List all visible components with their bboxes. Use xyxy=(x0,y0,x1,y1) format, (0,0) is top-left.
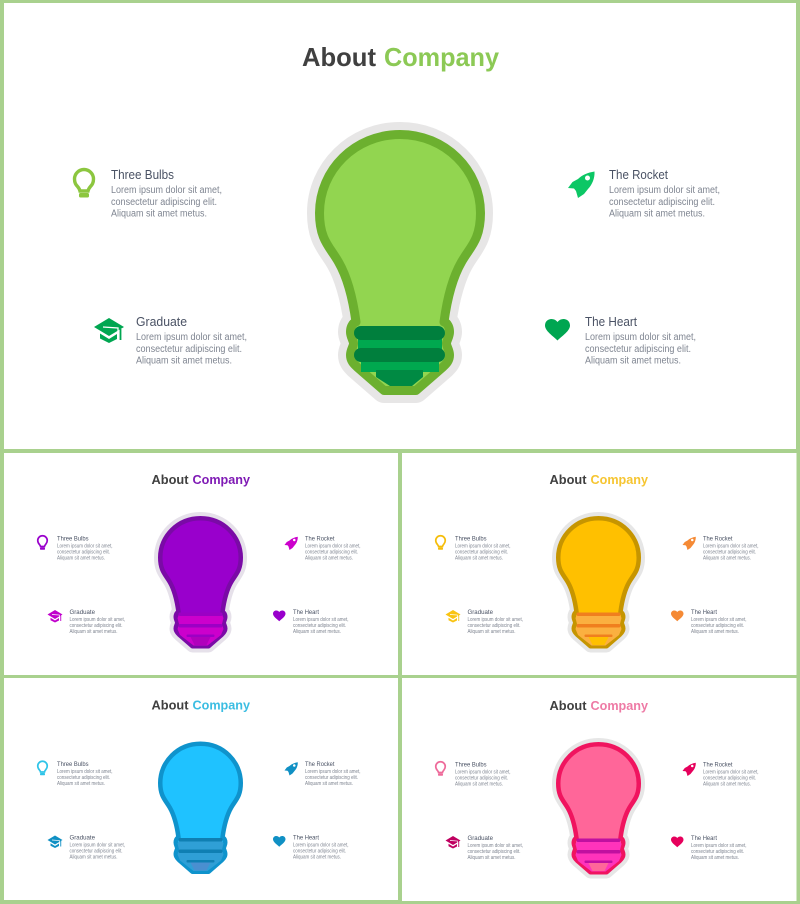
item: Three Bulbs: Aliquam sit amet metus. xyxy=(57,555,105,561)
item: Graduate: Lorem ipsum dolor sit amet, xyxy=(468,843,523,849)
item: Graduate: Lorem ipsum dolor sit amet, xyxy=(70,617,125,623)
title: About xyxy=(550,472,587,487)
item: The Heart: Aliquam sit amet metus. xyxy=(293,629,341,635)
title: About xyxy=(152,698,189,712)
item: The Rocket: Aliquam sit amet metus. xyxy=(305,555,353,561)
item: Graduate: consectetur adipiscing elit. xyxy=(136,344,242,355)
title accent: Company xyxy=(192,698,251,712)
light bulb xyxy=(320,134,480,390)
item: Graduate xyxy=(94,314,247,366)
item: Graduate: consectetur adipiscing elit. xyxy=(70,623,122,629)
item: Graduate: Graduate xyxy=(70,609,95,616)
item: The Heart xyxy=(273,834,348,860)
item: Three Bulbs: Three Bulbs xyxy=(57,761,89,768)
item: The Heart xyxy=(671,835,746,861)
item: Three Bulbs: Lorem ipsum dolor sit amet, xyxy=(111,185,222,196)
title accent: Company xyxy=(590,472,649,487)
item: Three Bulbs: Three Bulbs xyxy=(111,167,174,182)
item: Graduate: consectetur adipiscing elit. xyxy=(468,849,520,855)
item: The Heart: Lorem ipsum dolor sit amet, xyxy=(293,842,348,848)
item: Three Bulbs: Aliquam sit amet metus. xyxy=(455,555,503,561)
item: The Heart: The Heart xyxy=(585,314,637,329)
item: The Heart: Aliquam sit amet metus. xyxy=(691,855,739,861)
item: Graduate: Graduate xyxy=(70,834,95,842)
item: Graduate xyxy=(446,835,523,861)
item: Graduate: Lorem ipsum dolor sit amet, xyxy=(136,332,247,343)
item: Graduate: Graduate xyxy=(468,835,493,842)
item: The Heart xyxy=(671,609,746,635)
item: Three Bulbs xyxy=(436,762,510,787)
panel: blue slide xyxy=(4,678,398,900)
item: Three Bulbs: Lorem ipsum dolor sit amet, xyxy=(455,770,510,776)
item: The Heart: Lorem ipsum dolor sit amet, xyxy=(691,617,746,623)
item: The Rocket: The Rocket xyxy=(305,761,335,768)
item: The Heart: The Heart xyxy=(293,609,319,616)
item: Three Bulbs: consectetur adipiscing elit. xyxy=(57,550,110,556)
light bulb xyxy=(160,744,241,872)
item: The Rocket: consectetur adipiscing elit. xyxy=(703,550,756,556)
item: The Rocket: Lorem ipsum dolor sit amet, xyxy=(305,769,360,775)
item: Three Bulbs: consectetur adipiscing elit. xyxy=(455,550,508,556)
item: Three Bulbs: consectetur adipiscing elit. xyxy=(455,776,508,782)
item: The Heart: Lorem ipsum dolor sit amet, xyxy=(293,617,348,623)
item: The Heart: Aliquam sit amet metus. xyxy=(293,854,341,860)
item: Graduate: Aliquam sit amet metus. xyxy=(70,629,118,635)
title: About xyxy=(152,472,189,487)
item: The Rocket xyxy=(568,167,720,220)
item: Three Bulbs: Lorem ipsum dolor sit amet, xyxy=(57,769,112,775)
item: Graduate: Graduate xyxy=(468,609,493,616)
item: The Rocket: Lorem ipsum dolor sit amet, xyxy=(305,544,360,550)
panel: green main slide xyxy=(4,3,796,449)
light bulb xyxy=(558,744,639,872)
panel: orange slide xyxy=(402,453,796,675)
item: The Heart: The Heart xyxy=(691,835,717,842)
item: Three Bulbs xyxy=(74,167,222,220)
item: The Heart: Lorem ipsum dolor sit amet, xyxy=(585,332,696,343)
item: The Rocket: Lorem ipsum dolor sit amet, xyxy=(703,544,758,550)
item: The Rocket xyxy=(682,762,758,787)
item: The Rocket xyxy=(284,536,360,561)
item: Three Bulbs: Aliquam sit amet metus. xyxy=(57,781,105,787)
item: Three Bulbs: consectetur adipiscing elit. xyxy=(111,197,217,208)
item: The Rocket: consectetur adipiscing elit. xyxy=(305,775,358,781)
item: The Rocket xyxy=(682,536,758,561)
item: The Rocket: consectetur adipiscing elit. xyxy=(609,197,715,208)
panel: purple slide xyxy=(4,453,398,675)
light bulb xyxy=(160,518,241,646)
item: Three Bulbs: Lorem ipsum dolor sit amet, xyxy=(455,544,510,550)
item: The Rocket xyxy=(284,761,360,787)
item: The Rocket: Aliquam sit amet metus. xyxy=(703,781,751,787)
item: The Heart: The Heart xyxy=(691,609,717,616)
item: Three Bulbs: Aliquam sit amet metus. xyxy=(455,781,503,787)
item: Graduate xyxy=(446,609,523,635)
item: Graduate: Aliquam sit amet metus. xyxy=(70,854,118,860)
item: Graduate: Aliquam sit amet metus. xyxy=(468,855,516,861)
item: The Heart: The Heart xyxy=(293,834,319,842)
panel: pink slide xyxy=(402,678,796,901)
item: The Rocket: Aliquam sit amet metus. xyxy=(703,555,751,561)
light bulb xyxy=(558,518,639,646)
item: The Heart: Aliquam sit amet metus. xyxy=(691,629,739,635)
item: Graduate: Aliquam sit amet metus. xyxy=(136,356,232,366)
item: Three Bulbs: Three Bulbs xyxy=(455,762,487,768)
item: Three Bulbs: Lorem ipsum dolor sit amet, xyxy=(57,544,112,550)
item: The Rocket: Aliquam sit amet metus. xyxy=(609,208,705,220)
item: The Heart: Lorem ipsum dolor sit amet, xyxy=(691,843,746,849)
title: About xyxy=(302,42,376,72)
item: Three Bulbs xyxy=(38,761,112,787)
item: Three Bulbs: Three Bulbs xyxy=(455,536,487,542)
item: Three Bulbs: Three Bulbs xyxy=(57,536,89,542)
item: The Heart: consectetur adipiscing elit. xyxy=(293,848,346,854)
item: Graduate: Lorem ipsum dolor sit amet, xyxy=(70,842,125,848)
item: Graduate: consectetur adipiscing elit. xyxy=(468,623,520,629)
item: The Heart xyxy=(545,314,696,366)
item: The Rocket: The Rocket xyxy=(609,167,668,182)
item: The Rocket: Aliquam sit amet metus. xyxy=(305,781,353,787)
title accent: Company xyxy=(590,698,649,713)
item: The Heart: Aliquam sit amet metus. xyxy=(585,356,681,366)
title accent: Company xyxy=(384,42,500,72)
item: Graduate: Aliquam sit amet metus. xyxy=(468,629,516,635)
item: The Heart: consectetur adipiscing elit. xyxy=(691,623,744,629)
item: Graduate: consectetur adipiscing elit. xyxy=(70,848,122,854)
item: The Heart xyxy=(273,609,348,635)
item: The Heart: consectetur adipiscing elit. xyxy=(691,849,744,855)
item: The Heart: consectetur adipiscing elit. xyxy=(585,344,691,355)
item: Three Bulbs xyxy=(436,536,510,561)
item: Graduate: Lorem ipsum dolor sit amet, xyxy=(468,617,523,623)
item: Graduate xyxy=(48,834,125,860)
title: About xyxy=(550,698,587,713)
item: Three Bulbs: consectetur adipiscing elit. xyxy=(57,775,110,781)
item: Graduate: Graduate xyxy=(136,314,187,329)
item: Graduate xyxy=(48,609,125,635)
item: Three Bulbs: Aliquam sit amet metus. xyxy=(111,208,207,220)
item: The Rocket: The Rocket xyxy=(305,536,335,542)
title accent: Company xyxy=(192,472,251,487)
item: The Heart: consectetur adipiscing elit. xyxy=(293,623,346,629)
item: Three Bulbs xyxy=(38,536,112,561)
item: The Rocket: Lorem ipsum dolor sit amet, xyxy=(609,185,720,196)
item: The Rocket: Lorem ipsum dolor sit amet, xyxy=(703,770,758,776)
item: The Rocket: The Rocket xyxy=(703,762,733,768)
item: The Rocket: consectetur adipiscing elit. xyxy=(703,776,756,782)
item: The Rocket: The Rocket xyxy=(703,536,733,542)
item: The Rocket: consectetur adipiscing elit. xyxy=(305,550,358,556)
